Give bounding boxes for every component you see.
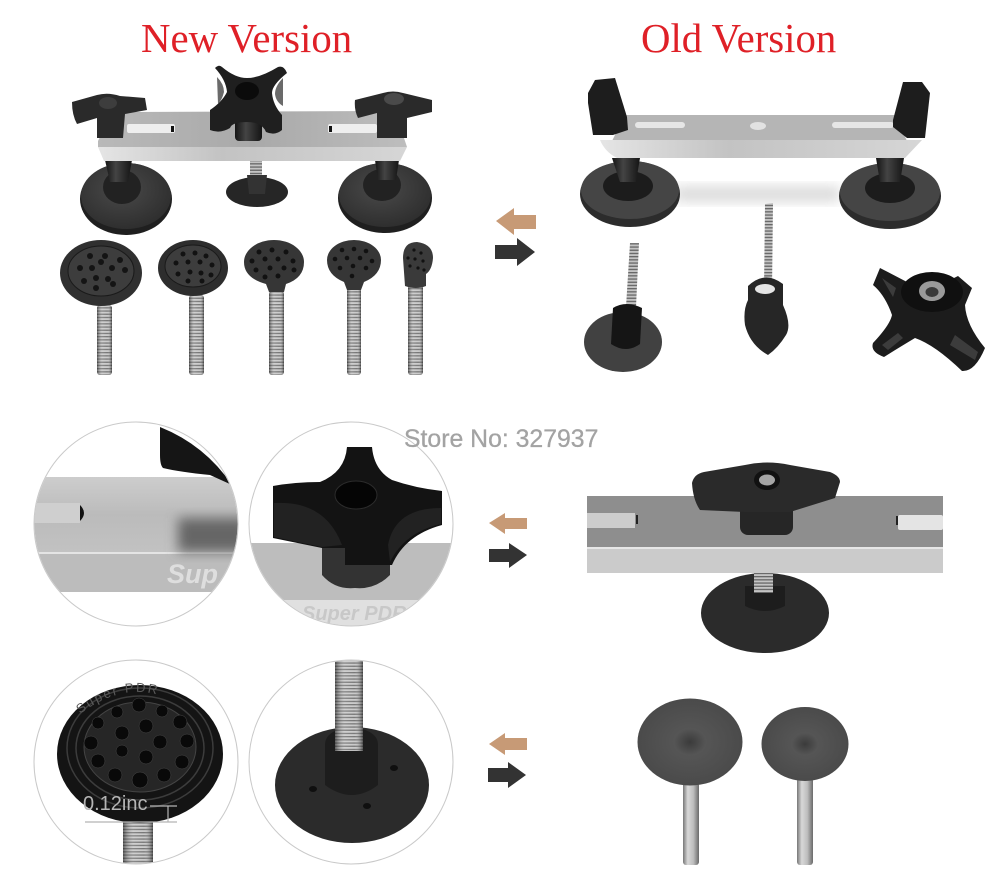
arrow: left tan: [489, 733, 527, 755]
central star knob: [210, 66, 287, 141]
short screw with disc foot: [584, 243, 662, 372]
engraved text on bar: Super PDR: [302, 603, 407, 625]
watermark: store number: Store No: 327937: [404, 426, 598, 453]
detail circle: pad face: [34, 660, 238, 864]
arrow pair row 2: [489, 513, 527, 568]
centre small foot with screw: [226, 160, 288, 207]
small smooth pad: [762, 707, 848, 865]
right disc: [839, 158, 941, 229]
dimension label: 0.12inc: [83, 793, 148, 815]
foot disc: [701, 571, 829, 653]
arrow: right dark: [488, 762, 526, 788]
panel: old smooth pads: [638, 698, 848, 865]
tall screw with pointed foot: [744, 203, 788, 355]
heading: Old Version: Old Version: [641, 16, 836, 61]
right suction disc: [338, 160, 432, 233]
panel: new version five pads: [60, 240, 433, 375]
arrow pair row 3: [488, 733, 527, 788]
pad 5: [403, 242, 433, 375]
pad 1: [60, 240, 142, 375]
dimension label: [83, 793, 177, 822]
aluminium bar: [600, 115, 922, 158]
large smooth pad: [638, 698, 742, 865]
bar: [587, 496, 943, 573]
arrow pair row 1: [495, 208, 536, 266]
pad 3: [244, 240, 304, 375]
engraved logo on bar: Sup: [167, 559, 218, 589]
pad 2: [158, 240, 228, 375]
detail circle: pad back: [249, 655, 453, 864]
arrow: left tan: [489, 513, 527, 534]
four-arm knob: [872, 268, 985, 371]
left wing knob: [72, 94, 147, 138]
aluminium bar: [98, 111, 407, 161]
detail circle: bar end: [30, 422, 250, 626]
shadow under bar: [675, 186, 840, 202]
arrow: left tan: [496, 208, 536, 235]
engraved logo on pad: Super PDR: [76, 682, 157, 712]
arrow: right dark: [495, 238, 535, 266]
heading: New Version: New Version: [141, 16, 352, 61]
panel: old version bridge puller: [580, 78, 985, 372]
left suction disc: [80, 160, 172, 235]
left hex knob: [588, 78, 628, 135]
wing knob: [692, 462, 840, 535]
panel: new version bridge puller: [72, 66, 432, 235]
detail circle: star knob: [249, 422, 460, 630]
right wing knob: [355, 92, 432, 138]
left disc: [580, 158, 680, 227]
pad 4: [327, 240, 381, 375]
arrow: right dark: [489, 543, 527, 568]
panel: old bar with wing knob: [587, 462, 943, 653]
right hex knob: [893, 82, 930, 138]
